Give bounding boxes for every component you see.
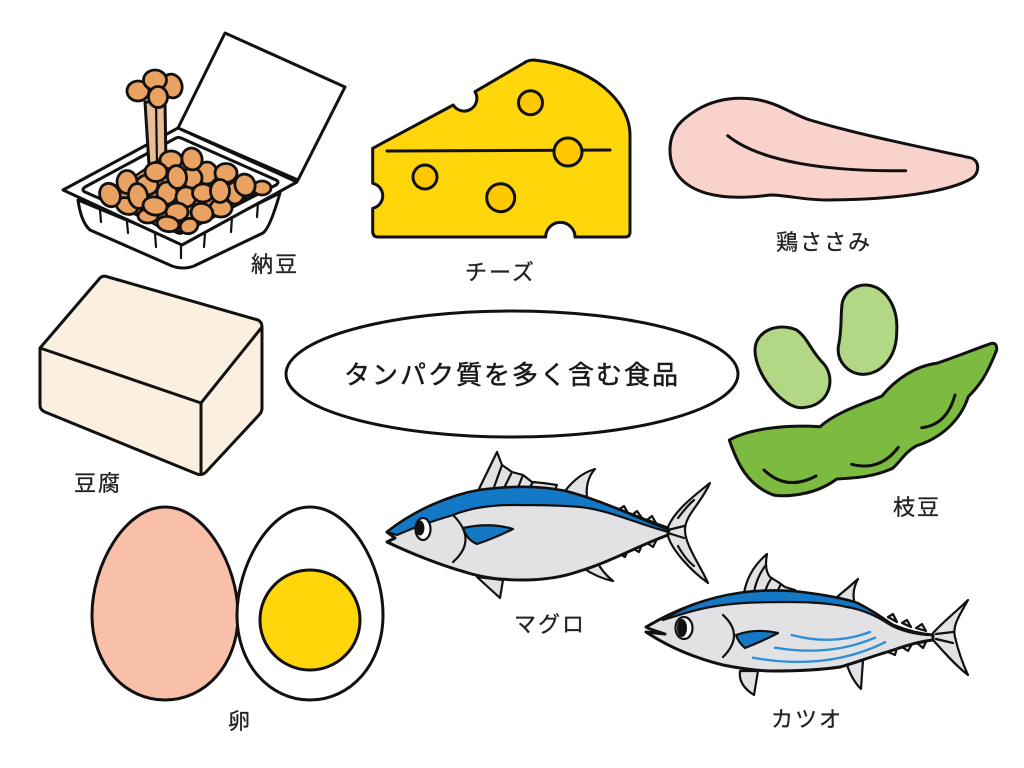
label: natto: 納豆 <box>251 252 299 277</box>
label: cheese: チーズ <box>465 260 536 285</box>
tofu edges <box>40 327 262 474</box>
bonito side stripes <box>753 632 885 662</box>
bonito second dorsal <box>837 579 858 604</box>
bonito finlets <box>888 614 926 655</box>
boiled egg yolk <box>260 570 360 670</box>
natto lid <box>178 33 345 180</box>
natto strings <box>145 102 166 165</box>
tuna eye <box>416 518 430 540</box>
label: edamame: 枝豆 <box>893 495 941 520</box>
bonito back stripe <box>663 591 928 635</box>
label: tuna: マグロ <box>514 612 586 637</box>
bonito dorsal fin <box>744 554 795 596</box>
natto beans lifted <box>127 70 185 108</box>
cheese body <box>373 60 630 237</box>
chicken body <box>670 98 978 200</box>
chicken crease <box>728 136 906 171</box>
pod creases <box>764 395 955 483</box>
edamame pod <box>729 343 997 496</box>
bonito lower fins <box>740 660 863 695</box>
illustration: cheese <box>373 60 630 237</box>
tuna back stripe <box>387 487 669 535</box>
bonito body <box>646 591 933 671</box>
tuna tail <box>668 483 710 583</box>
bonito pectoral fin <box>736 631 778 648</box>
title oval <box>286 311 738 437</box>
title: タンパク質を多く含む食品 <box>344 360 680 390</box>
label: egg: 卵 <box>228 709 252 734</box>
illustration: edamame <box>729 285 997 496</box>
illustration: tofu <box>40 276 262 475</box>
tuna body <box>387 487 668 580</box>
tuna pectoral fin <box>463 525 513 544</box>
bonito tail <box>933 600 968 675</box>
illustration: tuna <box>387 452 710 598</box>
whole egg <box>92 507 238 700</box>
label: chicken: 鶏ささみ <box>776 230 872 255</box>
illustration: chicken breast tender <box>670 98 978 200</box>
tuna lower fins <box>477 563 613 598</box>
tuna second dorsal <box>565 469 595 498</box>
illustration: egg <box>92 507 383 700</box>
illustration: bonito <box>646 554 968 695</box>
label: bonito: カツオ <box>771 707 843 732</box>
edamame bean left <box>755 327 830 408</box>
boiled egg white <box>237 507 383 700</box>
illustration: natto <box>63 33 345 268</box>
edamame bean right <box>838 285 897 374</box>
tuna finlets <box>618 506 657 557</box>
tuna dorsal fin <box>478 452 557 495</box>
tuna gill <box>453 515 466 562</box>
natto bean bed <box>106 152 264 231</box>
natto tray <box>78 193 280 268</box>
bonito gill <box>723 615 734 657</box>
bonito eye <box>676 617 692 639</box>
tofu block <box>40 276 262 475</box>
natto beans in tray <box>96 145 271 236</box>
label: tofu: 豆腐 <box>74 471 122 496</box>
cheese holes <box>518 91 542 115</box>
